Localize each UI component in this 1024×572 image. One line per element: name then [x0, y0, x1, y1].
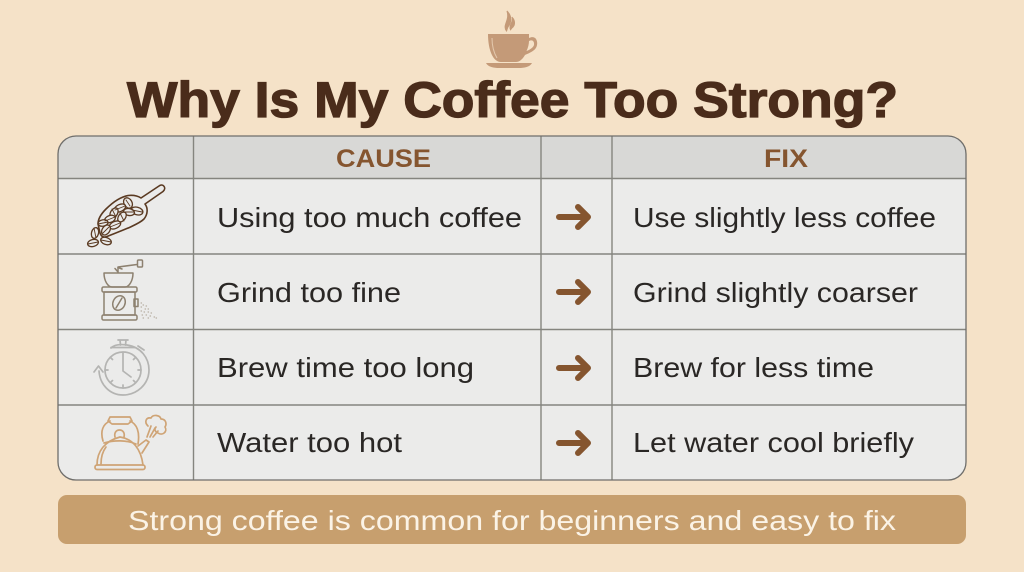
- icon: coffee scoop with beans: [87, 185, 165, 248]
- panel: table: [58, 136, 966, 480]
- footer banner: [58, 495, 966, 544]
- row 3 fix: Brew for less time: [633, 352, 874, 383]
- row 1 arrow: [559, 207, 588, 227]
- table body background: [58, 136, 966, 480]
- row 4 arrow: [559, 433, 588, 453]
- footer banner: Strong coffee is common for beginners and easy to fix: [128, 505, 896, 536]
- row 1 cause: Using too much coffee: [217, 202, 522, 233]
- row 1 fix: Use slightly less coffee: [633, 202, 936, 233]
- row 4 cause: Water too hot: [217, 427, 402, 458]
- icon: stopwatch: [94, 340, 149, 395]
- icon: coffee grinder: [102, 260, 157, 320]
- row 2 arrow: [559, 282, 588, 302]
- row 2 cause: Grind too fine: [217, 277, 401, 308]
- title: Why Is My Coffee Too Strong?: [127, 72, 898, 128]
- icon: coffee cup: [486, 11, 537, 68]
- row 3 arrow: [559, 358, 588, 378]
- row 2 fix: Grind slightly coarser: [633, 277, 918, 308]
- icon: kettle with steam: [95, 415, 166, 470]
- row 3 cause: Brew time too long: [217, 352, 474, 383]
- row 4 fix: Let water cool briefly: [633, 427, 914, 458]
- column heading: fix: FIX: [764, 145, 808, 173]
- column heading: cause: CAUSE: [336, 145, 431, 173]
- table header background: [58, 136, 966, 178]
